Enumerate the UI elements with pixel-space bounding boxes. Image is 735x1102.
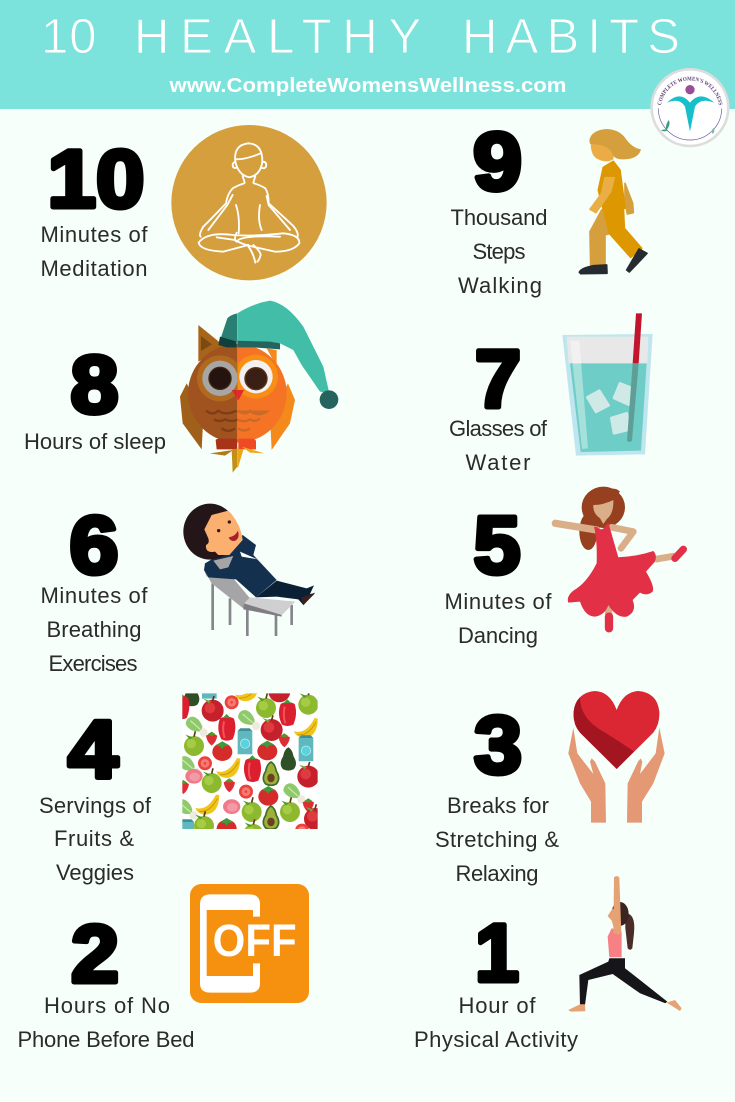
habit 5: minutes of dancing: Dancing xyxy=(458,623,538,648)
number 8: 8 xyxy=(70,340,118,430)
title: HABITS xyxy=(462,10,688,64)
logo badge xyxy=(650,68,730,148)
icon: fruits and vegetables pattern xyxy=(182,693,318,829)
number 7: 7 xyxy=(475,334,521,425)
habit 1: hour of physical activity: Physical Activity xyxy=(414,1027,578,1052)
label: Minutes of xyxy=(40,222,148,247)
number 4: 4 xyxy=(68,704,118,796)
label: Thousand xyxy=(450,205,548,230)
label: Glasses of xyxy=(449,416,548,441)
habit 3: breaks for stretching and relaxing: Stretching & xyxy=(435,827,559,852)
logo badge: COMPLETE WOMEN'S WELLNESS xyxy=(658,76,722,106)
habit 4: servings of fruits and veggies: Fruits & xyxy=(54,826,134,851)
icon: heart held by hands xyxy=(568,691,665,823)
number 3: 3 xyxy=(474,700,522,791)
habit 4: servings of fruits and veggies: Veggies xyxy=(56,860,134,885)
number 9: 9 xyxy=(473,116,522,208)
icon: yoga warrior pose xyxy=(568,876,682,1012)
icon: meditation circle xyxy=(171,125,327,280)
label: Hour of xyxy=(458,993,536,1018)
icon: relaxing man in chair xyxy=(183,504,315,636)
icon: walking person xyxy=(579,129,647,274)
number 5: 5 xyxy=(474,500,520,591)
habit 8: hours of sleep xyxy=(24,340,166,454)
label: Hours of No xyxy=(44,993,170,1018)
habit 3: breaks for stretching and relaxing: Relaxing xyxy=(456,861,538,886)
icon: dancer in red dress xyxy=(555,487,683,628)
number 2: 2 xyxy=(71,909,119,1000)
title: 10 xyxy=(41,10,98,64)
habit 9: thousand steps walking xyxy=(450,116,548,298)
number 10: 10 xyxy=(48,134,144,225)
habit 9: thousand steps walking: Steps xyxy=(472,239,526,264)
habit 2: hours of no phone before bed xyxy=(18,909,194,1052)
header banner xyxy=(0,0,735,109)
habit 6: minutes of breathing exercises xyxy=(40,500,148,676)
habit 10: minutes of meditation xyxy=(40,134,148,281)
habit 2: hours of no phone before bed: Phone Before Bed xyxy=(18,1027,194,1052)
habit 1: hour of physical activity xyxy=(414,908,578,1052)
habit 5: minutes of dancing xyxy=(444,500,552,648)
label: Breaks for xyxy=(447,793,549,818)
icon: phone off xyxy=(190,884,309,1003)
label: Minutes of xyxy=(444,589,552,614)
label: Servings of xyxy=(39,793,152,818)
habit 6: minutes of breathing exercises: Exercises xyxy=(48,651,138,676)
number 6: 6 xyxy=(70,500,118,591)
habit 10: minutes of meditation: Meditation xyxy=(40,256,148,281)
habit 3: breaks for stretching and relaxing xyxy=(435,700,559,886)
label: Minutes of xyxy=(40,583,148,608)
icon: owl with nightcap xyxy=(180,301,338,473)
icon: phone off: OFF xyxy=(213,915,297,966)
label: Hours of sleep xyxy=(24,429,166,454)
habit 4: servings of fruits and veggies xyxy=(39,704,152,885)
title: HEALTHY xyxy=(134,10,432,64)
habit 7: glasses of water: Water xyxy=(466,450,530,475)
habit 6: minutes of breathing exercises: Breathing xyxy=(46,617,142,642)
number 1: 1 xyxy=(475,908,519,999)
habit 9: thousand steps walking: Walking xyxy=(458,273,542,298)
icon: glass of water xyxy=(562,313,653,456)
habit 7: glasses of water xyxy=(449,334,548,475)
website url: www.CompleteWomensWellness.com xyxy=(168,75,566,97)
